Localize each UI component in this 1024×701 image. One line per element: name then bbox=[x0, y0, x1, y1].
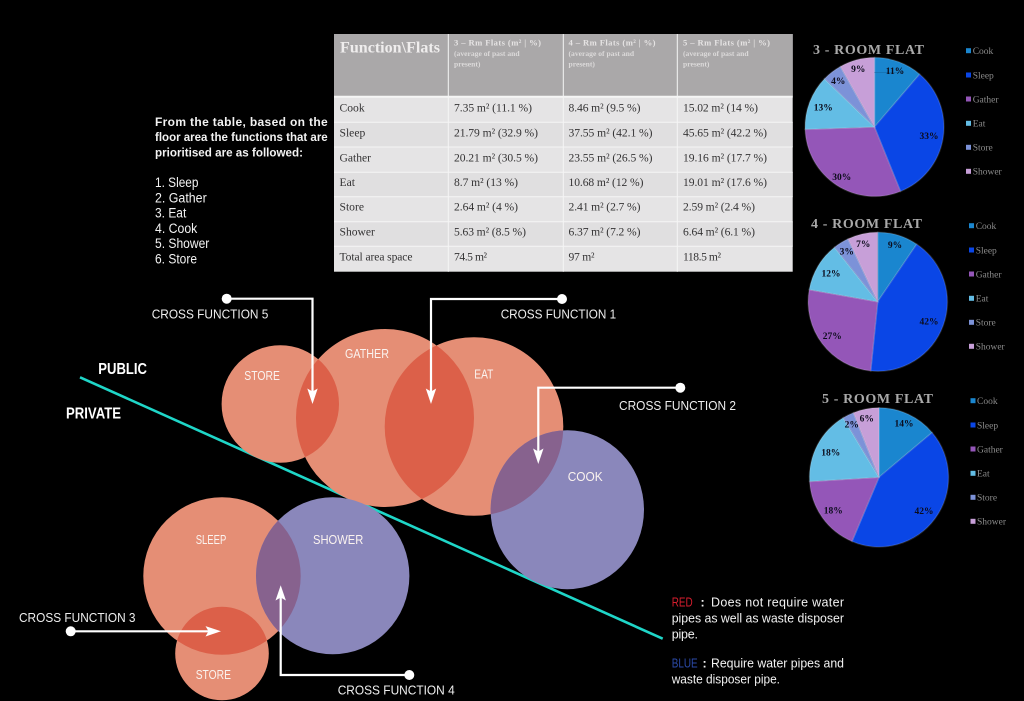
label: sleep: SLEEP bbox=[196, 532, 226, 547]
arrow: cross function 4: CROSS FUNCTION 4 bbox=[338, 682, 455, 697]
label: private: PRIVATE bbox=[66, 405, 121, 422]
legend: 4-room flat: Gather bbox=[976, 270, 1002, 280]
pie chart: 4-room flat: 3% bbox=[840, 248, 854, 258]
circle: lower store bbox=[175, 607, 269, 700]
table: floor area by function and flat type: 6.37 m² (7.2 %) bbox=[568, 225, 641, 238]
table: floor area by function and flat type: Total area space bbox=[340, 250, 412, 263]
table: floor area by function and flat type: (average of past and bbox=[568, 49, 635, 58]
label: store: STORE bbox=[244, 368, 280, 383]
legend: 4-room flat: Shower bbox=[976, 343, 1006, 353]
legend: 3-room flat: Sleep bbox=[973, 71, 994, 81]
table: floor area by function and flat type: 23.55 m² (26.5 %) bbox=[568, 151, 653, 164]
callout: colour key: Does not require water bbox=[711, 596, 844, 610]
legend: 4-room flat: Sleep bbox=[976, 246, 997, 256]
table: floor area by function and flat type: 6.64 m² (6.1 %) bbox=[683, 225, 755, 238]
table: floor area by function and flat type: 2.41 m² (2.7 %) bbox=[568, 201, 641, 214]
pie chart: 5-room flat: 42% bbox=[914, 507, 934, 517]
text block: prioritised functions: 4. Cook bbox=[155, 221, 198, 236]
table: floor area by function and flat type: 8.7 m² (13 %) bbox=[454, 176, 518, 189]
text block: prioritised functions: floor area the functions that are bbox=[155, 130, 328, 144]
callout: colour key: pipes as well as waste disposer bbox=[672, 611, 844, 625]
pie chart: 3-room flat: 3 - ROOM FLAT bbox=[813, 43, 925, 58]
pie chart: 5-room flat: 2% bbox=[845, 420, 859, 430]
table: floor area by function and flat type: 4 – Rm Flats (m² | %) bbox=[568, 38, 656, 48]
label: public: PUBLIC bbox=[98, 361, 147, 378]
arrow: cross function 2 bbox=[533, 383, 736, 464]
table: floor area by function and flat type: Shower bbox=[340, 225, 375, 238]
table: floor area by function and flat type: 5 – Rm Flats (m² | %) bbox=[683, 38, 770, 48]
table: floor area by function and flat type: 74.5 m² bbox=[454, 250, 488, 263]
pie chart: 4-room flat: 42% bbox=[920, 318, 938, 328]
table: floor area by function and flat type: 118.5 m² bbox=[683, 250, 722, 263]
overlap: sleep and shower bbox=[256, 521, 301, 631]
callout: colour key: : bbox=[702, 657, 707, 671]
arrow: cross function 1: CROSS FUNCTION 1 bbox=[501, 307, 616, 322]
text block: prioritised functions: 2. Gather bbox=[155, 190, 207, 205]
table: floor area by function and flat type: 97 m² bbox=[568, 250, 595, 263]
pie chart: 3-room flat bbox=[805, 43, 944, 196]
circle: sleep bbox=[143, 497, 301, 655]
pie chart: 4-room flat: 27% bbox=[823, 332, 842, 342]
callout: colour key: BLUE bbox=[672, 657, 698, 671]
text block: prioritised functions: 3. Eat bbox=[155, 206, 187, 221]
legend: 3-room flat: Shower bbox=[973, 168, 1003, 178]
circle: eat bbox=[385, 337, 563, 516]
callout: colour key bbox=[671, 596, 844, 686]
table: floor area by function and flat type: 20.21 m² (30.5 %) bbox=[454, 151, 538, 164]
overlap: eat and cook bbox=[490, 430, 564, 514]
table: floor area by function and flat type: 19.01 m² (17.6 %) bbox=[683, 176, 767, 189]
table: floor area by function and flat type: Eat bbox=[340, 176, 356, 189]
table: floor area by function and flat type: present) bbox=[568, 60, 595, 69]
arrow: cross function 3: CROSS FUNCTION 3 bbox=[19, 610, 136, 625]
table: floor area by function and flat type: (average of past and bbox=[454, 49, 520, 58]
text block: prioritised functions: 1. Sleep bbox=[155, 175, 198, 190]
legend: 4-room flat: Store bbox=[976, 319, 996, 329]
callout: colour key: RED bbox=[672, 596, 693, 610]
pie chart: 5-room flat: 6% bbox=[860, 414, 874, 424]
legend: 3-room flat bbox=[966, 47, 1003, 178]
table: floor area by function and flat type: 21.79 m² (32.9 %) bbox=[454, 126, 538, 140]
pie chart: 3-room flat: 11% bbox=[886, 67, 904, 77]
table: floor area by function and flat type: Sleep bbox=[340, 126, 365, 140]
circle: store bbox=[222, 345, 339, 463]
pie chart: 3-room flat: 4% bbox=[831, 77, 845, 87]
pie chart: 4-room flat: 9% bbox=[888, 241, 902, 251]
legend: 5-room flat: Eat bbox=[977, 470, 990, 480]
pie chart: 3-room flat: 30% bbox=[832, 173, 851, 183]
text block: prioritised functions: 6. Store bbox=[155, 252, 197, 266]
arrow: cross function 2: CROSS FUNCTION 2 bbox=[619, 398, 736, 413]
legend: 3-room flat: Gather bbox=[973, 95, 999, 105]
text block: prioritised functions: 5. Shower bbox=[155, 236, 210, 251]
callout: colour key: pipe. bbox=[672, 627, 698, 641]
pie chart: 4-room flat: 4 - ROOM FLAT bbox=[811, 217, 923, 232]
label: gather: GATHER bbox=[345, 346, 389, 361]
pie chart: 5-room flat: 14% bbox=[894, 420, 914, 430]
legend: 5-room flat: Shower bbox=[977, 518, 1007, 528]
arrow: cross function 4 bbox=[276, 585, 455, 697]
pie chart: 4-room flat: 12% bbox=[822, 270, 840, 280]
legend: 3-room flat: Eat bbox=[973, 120, 986, 130]
label: lower store: STORE bbox=[196, 667, 231, 682]
legend: 5-room flat: Sleep bbox=[977, 421, 998, 431]
pie chart: 5-room flat bbox=[809, 392, 949, 547]
table: floor area by function and flat type: Store bbox=[340, 201, 364, 214]
table: floor area by function and flat type: 2.59 m² (2.4 %) bbox=[683, 201, 755, 214]
table: floor area by function and flat type: 15.02 m² (14 %) bbox=[683, 102, 758, 115]
label: shower: SHOWER bbox=[313, 532, 363, 547]
venn diagram: public functions bbox=[222, 329, 644, 589]
label: cook: COOK bbox=[568, 469, 603, 484]
arrow: cross function 5 bbox=[152, 294, 318, 404]
table: floor area by function and flat type: 8.46 m² (9.5 %) bbox=[568, 102, 641, 115]
callout: colour key: waste disposer pipe. bbox=[671, 672, 780, 686]
venn diagram: private functions bbox=[143, 497, 409, 700]
pie chart: 5-room flat: 5 - ROOM FLAT bbox=[822, 392, 934, 407]
legend: 5-room flat bbox=[970, 397, 1007, 528]
pie chart: 3-room flat: 13% bbox=[814, 104, 833, 114]
pie chart: 3-room flat: 9% bbox=[851, 65, 865, 75]
table: floor area by function and flat type: 2.64 m² (4 %) bbox=[454, 201, 518, 214]
arrow: cross function 3 bbox=[19, 610, 221, 636]
text block: prioritised functions: prioritised are as followed: bbox=[155, 146, 303, 160]
circle: cook bbox=[491, 430, 644, 589]
legend: 4-room flat: Cook bbox=[976, 222, 997, 232]
pie chart: 4-room flat bbox=[808, 217, 947, 371]
table: floor area by function and flat type: 3 – Rm Flats (m² | %) bbox=[454, 38, 541, 48]
pie chart: 5-room flat: 18% bbox=[824, 506, 843, 516]
legend: 4-room flat bbox=[969, 222, 1006, 353]
pie chart: 3-room flat: 33% bbox=[920, 132, 938, 142]
circle: gather bbox=[296, 329, 474, 507]
legend: 5-room flat: Store bbox=[977, 494, 997, 504]
overlap: gather and eat bbox=[384, 346, 474, 499]
table: floor area by function and flat type: Function\Flats bbox=[340, 40, 440, 57]
table: floor area by function and flat type bbox=[334, 34, 793, 272]
public/private divider line bbox=[80, 377, 663, 639]
table: floor area by function and flat type: 7.35 m² (11.1 %) bbox=[454, 102, 532, 115]
arrow: cross function 5: CROSS FUNCTION 5 bbox=[152, 307, 268, 322]
table: floor area by function and flat type: 5.63 m² (8.5 %) bbox=[454, 225, 526, 238]
table: floor area by function and flat type: present) bbox=[454, 60, 481, 69]
table: floor area by function and flat type: (average of past and bbox=[683, 49, 749, 58]
arrow: cross function 1 bbox=[426, 294, 616, 404]
table: floor area by function and flat type: Cook bbox=[340, 102, 365, 115]
legend: 3-room flat: Store bbox=[973, 144, 993, 154]
table: floor area by function and flat type: present) bbox=[683, 60, 710, 69]
table: floor area by function and flat type: 45.65 m² (42.2 %) bbox=[683, 126, 767, 140]
text block: prioritised functions: From the table, based on the bbox=[155, 115, 328, 129]
table: floor area by function and flat type: 19.16 m² (17.7 %) bbox=[683, 151, 767, 164]
text block: prioritised functions bbox=[155, 115, 328, 266]
legend: 4-room flat: Eat bbox=[976, 295, 989, 305]
pie chart: 4-room flat: 7% bbox=[856, 240, 870, 250]
pie chart: 5-room flat: 18% bbox=[821, 449, 840, 459]
table: floor area by function and flat type: Gather bbox=[340, 151, 371, 164]
legend: 3-room flat: Cook bbox=[973, 47, 994, 57]
callout: colour key: Require water pipes and bbox=[711, 657, 844, 671]
overlap: sleep and store bbox=[177, 606, 267, 655]
callout: colour key: : bbox=[700, 596, 705, 610]
legend: 5-room flat: Cook bbox=[977, 397, 998, 407]
legend: 5-room flat: Gather bbox=[977, 445, 1004, 455]
label: eat: EAT bbox=[474, 367, 493, 382]
table: floor area by function and flat type: 37.55 m² (42.1 %) bbox=[568, 126, 653, 140]
circle: shower bbox=[256, 497, 409, 654]
table: floor area by function and flat type: 10.68 m² (12 %) bbox=[568, 176, 644, 189]
overlap: store and gather bbox=[296, 359, 339, 457]
